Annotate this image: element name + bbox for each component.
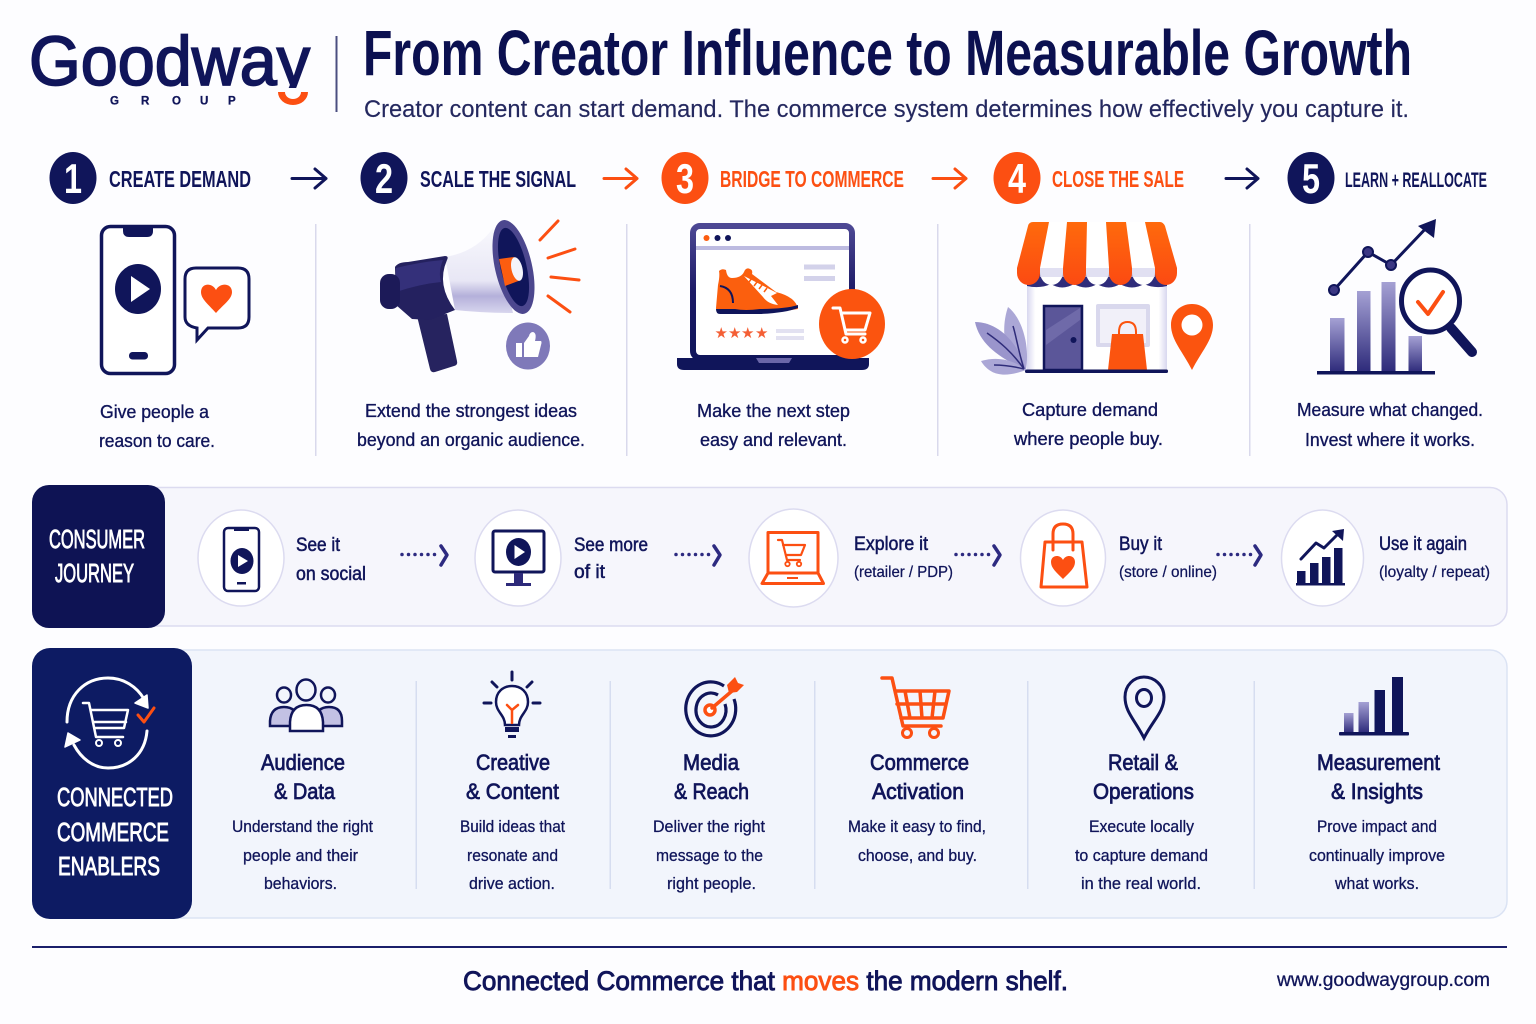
journey step: use it again xyxy=(1282,510,1490,606)
dotted arrow xyxy=(402,546,447,565)
icon: laptop with shoe and cart: ★★★★ xyxy=(714,324,768,342)
step 4 caption: Capture demand xyxy=(1022,400,1158,420)
icon: phone with heart bubble xyxy=(102,226,249,374)
step 2 caption xyxy=(357,401,585,450)
journey step: see more of it: of it xyxy=(574,562,606,583)
enabler: media and reach: Media xyxy=(683,750,740,775)
enablers label with cart cycle icon: COMMERCE xyxy=(57,817,169,847)
enabler: audience and data: people and their xyxy=(243,846,358,865)
enabler: retail and operations: Execute locally xyxy=(1089,817,1194,836)
journey step: see more of it xyxy=(475,510,648,606)
enabler: commerce activation xyxy=(848,678,986,865)
dotted arrow xyxy=(1218,546,1261,565)
subtitle: Creator content can start demand. The commerce system determines how effectively you capture it. xyxy=(364,96,1409,123)
enabler: audience and data: behaviors. xyxy=(264,874,337,893)
enabler: media and reach xyxy=(653,677,765,893)
step 4 caption xyxy=(1013,400,1163,449)
dotted arrow xyxy=(956,546,1000,565)
enabler: retail and operations xyxy=(1075,677,1208,893)
journey step: buy it: Buy it xyxy=(1119,534,1163,555)
dotted arrow xyxy=(676,546,720,565)
step 4 header: close the sale: CLOSE THE SALE xyxy=(1052,166,1184,192)
journey label: CONSUMER xyxy=(49,524,145,554)
enabler: audience and data xyxy=(232,680,373,893)
logo: Goodway Group: Goodway xyxy=(29,22,310,100)
step 3 caption xyxy=(697,401,850,450)
footer tagline: Connected Commerce that moves the modern shelf. xyxy=(463,966,1068,996)
enabler: measurement and insights: Measurement xyxy=(1317,750,1440,775)
step 5 header: learn + reallocate: 5 xyxy=(1302,155,1320,202)
step 3 header: bridge to commerce: BRIDGE TO COMMERCE xyxy=(720,166,904,192)
step 2 header: scale the signal: SCALE THE SIGNAL xyxy=(420,166,576,192)
enabler: retail and operations: in the real world. xyxy=(1081,874,1201,893)
step 2 header: scale the signal xyxy=(360,152,576,204)
enabler: creative and content xyxy=(460,672,565,893)
enablers label with cart cycle icon: ENABLERS xyxy=(58,851,160,881)
step 2 header: scale the signal: 2 xyxy=(375,155,393,202)
arrow xyxy=(604,169,637,188)
journey step: see it on social xyxy=(198,510,366,606)
journey step: use it again: Use it again xyxy=(1379,534,1467,555)
enabler: measurement and insights: & Insights xyxy=(1331,779,1423,804)
enabler: creative and content: Creative xyxy=(476,750,550,775)
step 4 caption: where people buy. xyxy=(1013,429,1163,449)
enabler: retail and operations: Retail & xyxy=(1108,750,1178,775)
step 1 header: create demand xyxy=(50,152,251,204)
enabler: media and reach: & Reach xyxy=(674,779,749,804)
enabler: audience and data: Understand the right xyxy=(232,817,373,836)
step 5 caption xyxy=(1297,400,1483,450)
enabler: measurement and insights: continually improve xyxy=(1309,846,1445,865)
enabler: measurement and insights: what works. xyxy=(1334,874,1419,893)
step 3 header: bridge to commerce xyxy=(662,152,904,204)
enabler: creative and content: drive action. xyxy=(469,874,555,893)
icon: storefront with pin xyxy=(975,222,1213,375)
step 3 caption: Make the next step xyxy=(697,401,850,421)
step 3 caption: easy and relevant. xyxy=(700,430,847,450)
step 2 caption: beyond an organic audience. xyxy=(357,430,585,450)
journey step: buy it xyxy=(1020,510,1217,606)
step 4 header: close the sale: 4 xyxy=(1008,155,1026,202)
journey step: explore it: Explore it xyxy=(854,534,929,555)
journey step: see more of it: See more xyxy=(574,535,648,556)
enabler: creative and content: Build ideas that xyxy=(460,817,565,836)
enabler: audience and data: Audience xyxy=(261,750,345,775)
panel: consumer journey xyxy=(32,485,1507,628)
step 1 caption: reason to care. xyxy=(99,431,215,451)
step 1 header: create demand: 1 xyxy=(64,155,82,202)
journey step: see it on social: on social xyxy=(296,564,366,585)
journey label: JOURNEY xyxy=(55,558,134,588)
enabler: commerce activation: Make it easy to find, xyxy=(848,817,986,836)
enabler: creative and content: resonate and xyxy=(467,846,558,865)
enabler: retail and operations: Operations xyxy=(1093,779,1194,804)
footer website: www.goodwaygroup.com xyxy=(1276,970,1490,991)
enabler: audience and data: & Data xyxy=(274,779,336,804)
enabler: measurement and insights: Prove impact and xyxy=(1317,817,1437,836)
enabler: media and reach: Deliver the right xyxy=(653,817,765,836)
step 1 caption: Give people a xyxy=(100,402,210,422)
journey step: use it again: (loyalty / repeat) xyxy=(1379,564,1490,581)
enabler: retail and operations: to capture demand xyxy=(1075,846,1208,865)
arrow xyxy=(933,169,966,188)
journey label xyxy=(32,485,165,628)
enabler: commerce activation: Activation xyxy=(872,779,964,804)
enabler: media and reach: right people. xyxy=(667,874,756,893)
journey step: explore it xyxy=(749,509,953,607)
step 5 caption: Invest where it works. xyxy=(1305,430,1475,450)
panel: connected commerce enablers xyxy=(32,648,1507,919)
enablers label with cart cycle icon: CONNECTED xyxy=(57,782,173,812)
enabler: creative and content: & Content xyxy=(466,779,559,804)
arrow xyxy=(1226,169,1258,188)
step 1 header: create demand: CREATE DEMAND xyxy=(109,166,251,192)
icon: laptop with shoe and cart xyxy=(677,226,885,370)
step 5 header: learn + reallocate xyxy=(1288,152,1487,204)
step 5 caption: Measure what changed. xyxy=(1297,400,1483,420)
enabler: media and reach: message to the xyxy=(656,846,763,865)
journey step: buy it: (store / online) xyxy=(1119,564,1217,581)
journey step: see it on social: See it xyxy=(296,535,341,556)
enabler: commerce activation: Commerce xyxy=(870,750,969,775)
step 1 caption xyxy=(99,402,215,451)
enablers label with cart cycle icon xyxy=(32,648,192,919)
icon: bar chart with magnifier xyxy=(1317,219,1472,374)
enabler: measurement and insights xyxy=(1309,677,1445,893)
icon: megaphone xyxy=(380,216,579,372)
journey step: explore it: (retailer / PDP) xyxy=(854,564,953,581)
step 3 header: bridge to commerce: 3 xyxy=(676,155,694,202)
enabler: commerce activation: choose, and buy. xyxy=(858,846,977,865)
step 2 caption: Extend the strongest ideas xyxy=(365,401,577,421)
logo: Goodway Group: GROUP xyxy=(110,96,236,108)
arrow xyxy=(292,169,326,188)
step 4 header: close the sale xyxy=(994,152,1184,204)
